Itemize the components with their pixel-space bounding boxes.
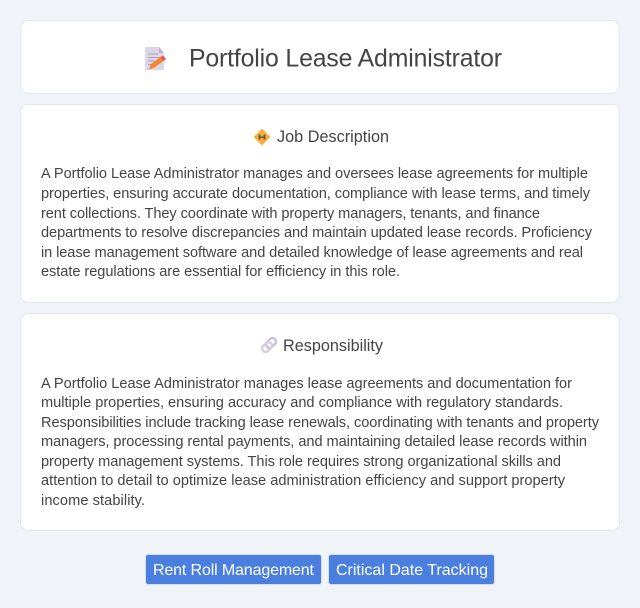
tag: rent roll management: Rent Roll Management — [153, 562, 315, 579]
text: responsibility body — [41, 376, 600, 509]
text: job description body: rent collections. They coordinate with property managers, tenants, and finance — [41, 206, 540, 222]
text: responsibility body: multiple properties, ensuring accuracy and compliance with regulatory standards. — [41, 395, 563, 411]
tag: critical date tracking — [328, 554, 494, 584]
tag: critical date tracking: Critical Date Tracking — [336, 562, 488, 579]
icon: link — [261, 337, 277, 353]
text: job description body: properties, ensuring accurate documentation, compliance with lease terms, and timely — [41, 186, 591, 202]
title: Portfolio Lease Administrator — [189, 46, 502, 72]
text: responsibility body: A Portfolio Lease Administrator manages lease agreements and documentation for — [41, 376, 572, 392]
text: job description body: in lease management software and detailed knowledge of lease agreements and real — [41, 245, 583, 261]
icon: diamond sign — [254, 128, 270, 146]
panel: job description — [20, 104, 620, 302]
heading: job description: Job Description — [277, 128, 389, 146]
text: responsibility body: income stability. — [41, 493, 145, 509]
heading: responsibility: Responsibility — [283, 337, 384, 355]
panel: header — [20, 20, 620, 94]
text: responsibility body: attention to detail to optimize lease administration efficiency and support property — [41, 473, 566, 489]
tag: rent roll management — [146, 554, 322, 584]
panel: responsibility — [20, 314, 620, 530]
text: job description body: estate regulations are essential for efficiency in this role. — [41, 264, 400, 280]
text: responsibility body: Responsibilities include tracking lease renewals, coordinating with tenants and property — [41, 415, 600, 431]
text: responsibility body: property management systems. This role requires strong organizational skills and — [41, 454, 561, 470]
text: responsibility body: managers, processing rental payments, and maintaining detailed lease records within — [41, 434, 587, 450]
text: job description body: A Portfolio Lease Administrator manages and oversees lease agreements for multiple — [41, 166, 588, 182]
text: job description body: departments to resolve discrepancies and maintain updated lease records. Proficiency — [41, 225, 593, 241]
icon: document with pencil — [145, 47, 166, 70]
text: job description body — [41, 166, 593, 280]
